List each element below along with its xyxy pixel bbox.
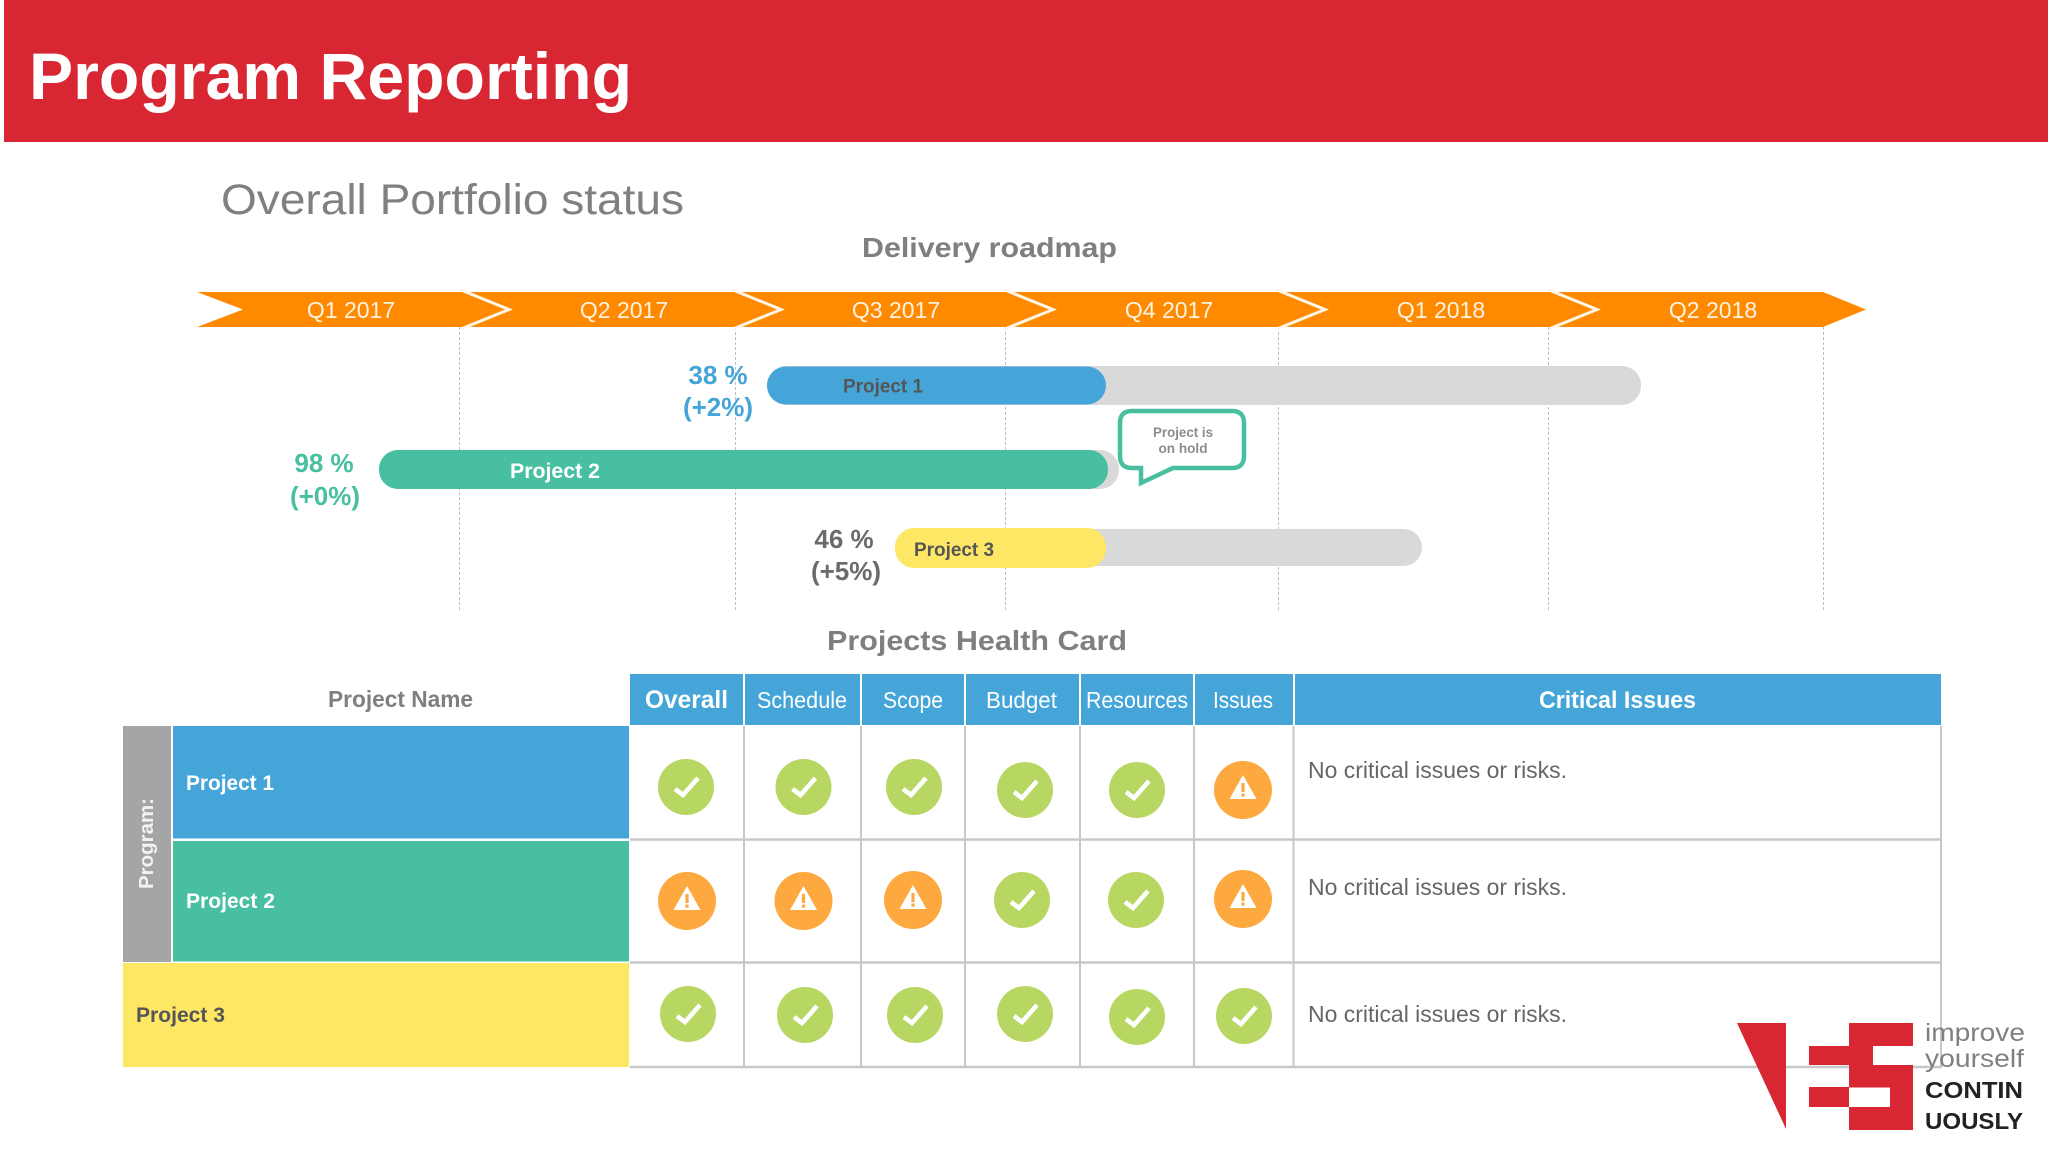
gantt bar: project 1: Project 1 [843,376,923,398]
progress label: project 1: 38 % [688,360,748,390]
status icons: project 1 [658,759,1272,819]
icon: issues ok [1216,988,1272,1044]
icon: schedule ok [777,987,833,1043]
callout: project on hold: Project is [1153,424,1213,440]
gantt bar: project 3 [895,528,1422,568]
icon: overall ok [660,986,716,1042]
icon: resources ok [1109,989,1165,1045]
critical issues text: No critical issues or risks. [1308,757,1567,783]
progress label: project 3: 46 % [814,524,874,554]
row label: project 1: Project 1 [186,772,274,795]
icon: overall ok [658,759,714,815]
row label: project 3 [123,963,629,1067]
heading: projects health card: Projects Health Card [827,625,1127,656]
icon: resources ok [1109,762,1165,818]
gantt bar: project 2: Project 2 [510,460,600,483]
row label: project 1 [173,726,629,838]
row label: project 3: Project 3 [136,1004,225,1027]
logo [1737,1019,2025,1134]
table header row [328,674,1941,725]
logo: UOUSLY [1925,1108,2023,1134]
program side label [123,726,171,962]
icon: scope warning [884,871,942,929]
icon: schedule warning [774,872,832,930]
critical issues text: No critical issues or risks. [1308,1001,1567,1027]
table header row: Critical Issues [1539,687,1696,714]
status icons: project 2 [658,870,1272,930]
progress label: project 2: (+0%) [290,481,360,511]
icon: resources ok [1108,872,1164,928]
table header row: Scope [883,687,943,713]
timeline quarter band [197,290,1866,329]
progress label: project 2 [290,448,360,511]
health table grid [630,726,1942,1067]
progress label: project 1: (+2%) [683,392,753,422]
timeline quarter band: Q2 2017 [580,297,668,323]
progress label: project 3 [811,524,881,586]
progress label: project 1 [683,360,753,422]
icon: budget ok [997,762,1053,818]
icon: issues warning [1214,761,1272,819]
critical issues text [1308,757,1567,1027]
critical issues text: No critical issues or risks. [1308,874,1567,900]
row label: project 2: Project 2 [186,890,275,913]
icon: schedule ok [776,759,832,815]
icon: scope ok [886,759,942,815]
logo: yourself [1925,1045,2024,1073]
title: Program Reporting [29,39,632,113]
roadmap grid lines [460,327,1824,612]
header banner [4,0,2048,142]
gantt bar: project 1 [767,366,1641,405]
logo: CONTIN [1925,1077,2023,1103]
table header row: Schedule [757,687,847,713]
table header row: Project Name [328,686,473,712]
timeline quarter band: Q1 2018 [1397,297,1485,323]
gantt bar: project 3: Project 3 [914,540,994,561]
timeline quarter band: Q2 2018 [1669,297,1757,323]
table header row: Budget [986,687,1058,713]
timeline quarter band: Q4 2017 [1125,297,1213,323]
row label: project 2 [173,841,629,962]
icon: issues warning [1214,870,1272,928]
icon: budget ok [997,986,1053,1042]
icon: scope ok [887,987,943,1043]
program side label: Program: [136,798,158,889]
timeline quarter band: Q1 2017 [307,297,395,323]
callout: project on hold: on hold [1158,440,1208,456]
progress label: project 2: 98 % [294,448,354,478]
progress label: project 3: (+5%) [811,556,881,586]
table header row: Overall [645,686,728,714]
table header row: Resources [1086,687,1188,713]
table header row: Issues [1213,687,1273,713]
gantt bar: project 2 [379,450,1119,489]
callout: project on hold [1120,411,1244,483]
icon: overall warning [658,872,716,930]
timeline quarter band: Q3 2017 [852,297,940,323]
status icons: project 3 [660,986,1272,1045]
logo: improve [1925,1019,2025,1047]
icon: budget ok [994,872,1050,928]
subtitle: overall portfolio status: Overall Portfolio status [221,176,684,224]
heading: delivery roadmap: Delivery roadmap [862,232,1117,263]
